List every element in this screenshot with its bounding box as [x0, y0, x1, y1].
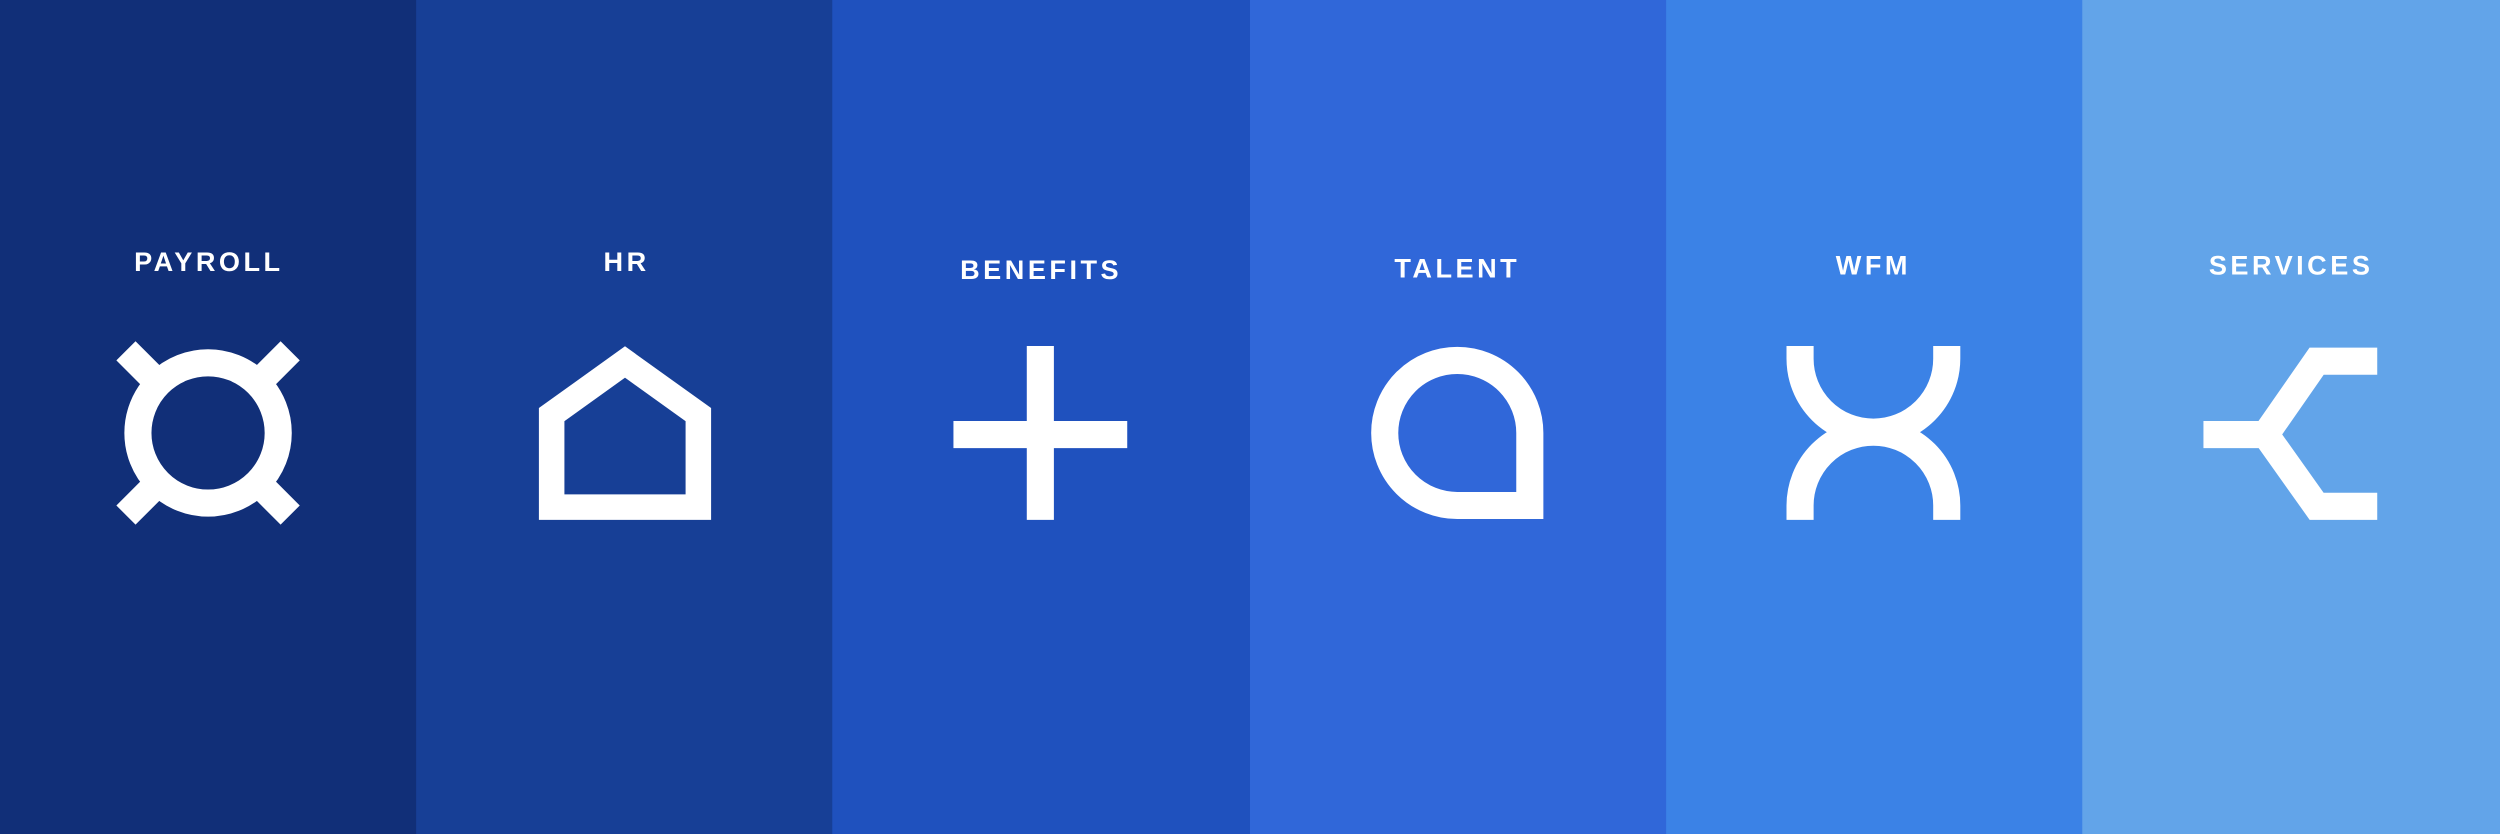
heading: services: SERVICES	[2209, 249, 2373, 280]
icon: speech drop	[1385, 360, 1530, 506]
panel: wfm	[1666, 0, 2083, 834]
icon: payroll currency symbol	[126, 351, 290, 515]
panel: services	[2082, 0, 2500, 834]
icon: house	[552, 362, 698, 507]
panel: benefits	[832, 0, 1251, 834]
icon: plus	[953, 346, 1127, 520]
panel: payroll	[0, 0, 417, 834]
panel: hr	[416, 0, 833, 834]
heading: wfm: WFM	[1836, 249, 1911, 280]
heading: hr: HR	[604, 246, 650, 277]
heading: payroll: PAYROLL	[134, 246, 284, 277]
icon: services branch	[2203, 361, 2377, 506]
heading: talent: TALENT	[1394, 252, 1520, 283]
panel: talent	[1250, 0, 1667, 834]
heading: benefits: BENEFITS	[960, 254, 1122, 285]
icon: wfm crossing arcs	[1800, 346, 1947, 520]
